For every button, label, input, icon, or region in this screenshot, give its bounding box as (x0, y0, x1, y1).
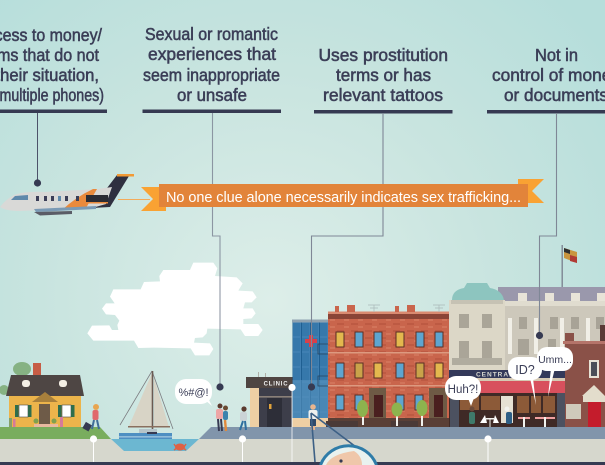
magnifier inset at bottom (311, 413, 376, 465)
cafe tables and patrons (469, 406, 555, 427)
white ground markers (90, 384, 492, 462)
couple walking (216, 404, 228, 431)
connector: access to money (34, 113, 41, 187)
person with suitcase (82, 404, 99, 431)
heading: prostitution terms: terms or has (336, 65, 431, 85)
connector: prostitution terms (308, 113, 383, 391)
banner (141, 179, 544, 211)
banner string (118, 198, 150, 200)
heading: sexual or romantic: or unsafe (177, 85, 247, 105)
speech bubble: %#@!: %#@! (178, 387, 209, 399)
speech bubble: ID? (508, 357, 542, 405)
speech bubble: Umm...: Umm... (538, 354, 572, 366)
plane (0, 174, 134, 216)
heading: prostitution terms: Uses prostitution (318, 45, 448, 65)
clinic (246, 372, 293, 427)
heading: sexual or romantic: seem inappropriate (143, 65, 280, 85)
banner: No one clue alone necessarily indicates sex trafficking... (166, 190, 521, 206)
connector: not in control (536, 113, 556, 339)
heading: sexual or romantic: experiences that (148, 44, 276, 64)
grass (0, 427, 111, 439)
grand central building: CENTRAL (476, 372, 514, 378)
heading: sexual or romantic: Sexual or romantic (145, 24, 278, 44)
glass hospital building (292, 320, 330, 427)
speech bubble: %#@! (175, 379, 212, 406)
brick building right (563, 325, 605, 427)
heading: access to money (0, 25, 107, 113)
crab (174, 444, 186, 450)
house (0, 362, 84, 427)
heading: sexual or romantic (142, 24, 281, 113)
heading: prostitution terms (314, 45, 452, 114)
bottom dark bar (0, 462, 605, 465)
heading: not in control: Not in (535, 45, 578, 65)
brick row houses (326, 305, 450, 427)
grand central building (449, 245, 605, 427)
man with tattoo (308, 404, 318, 430)
speech bubble: Huh?! (445, 376, 481, 406)
speech bubble: Umm... (537, 347, 573, 397)
heading: prostitution terms: relevant tattoos (323, 85, 443, 105)
pavement (199, 427, 605, 439)
cloud (87, 263, 263, 355)
speech bubble: ID?: ID? (515, 363, 535, 377)
heading: not in control (487, 45, 605, 114)
sailboat (119, 371, 173, 439)
ground band (0, 439, 605, 462)
water (111, 439, 199, 451)
speech bubble: Huh?!: Huh?! (448, 384, 478, 396)
woman walking (240, 406, 247, 430)
clinic: CLINIC (264, 382, 288, 388)
connector: sexual experiences (212, 113, 224, 391)
